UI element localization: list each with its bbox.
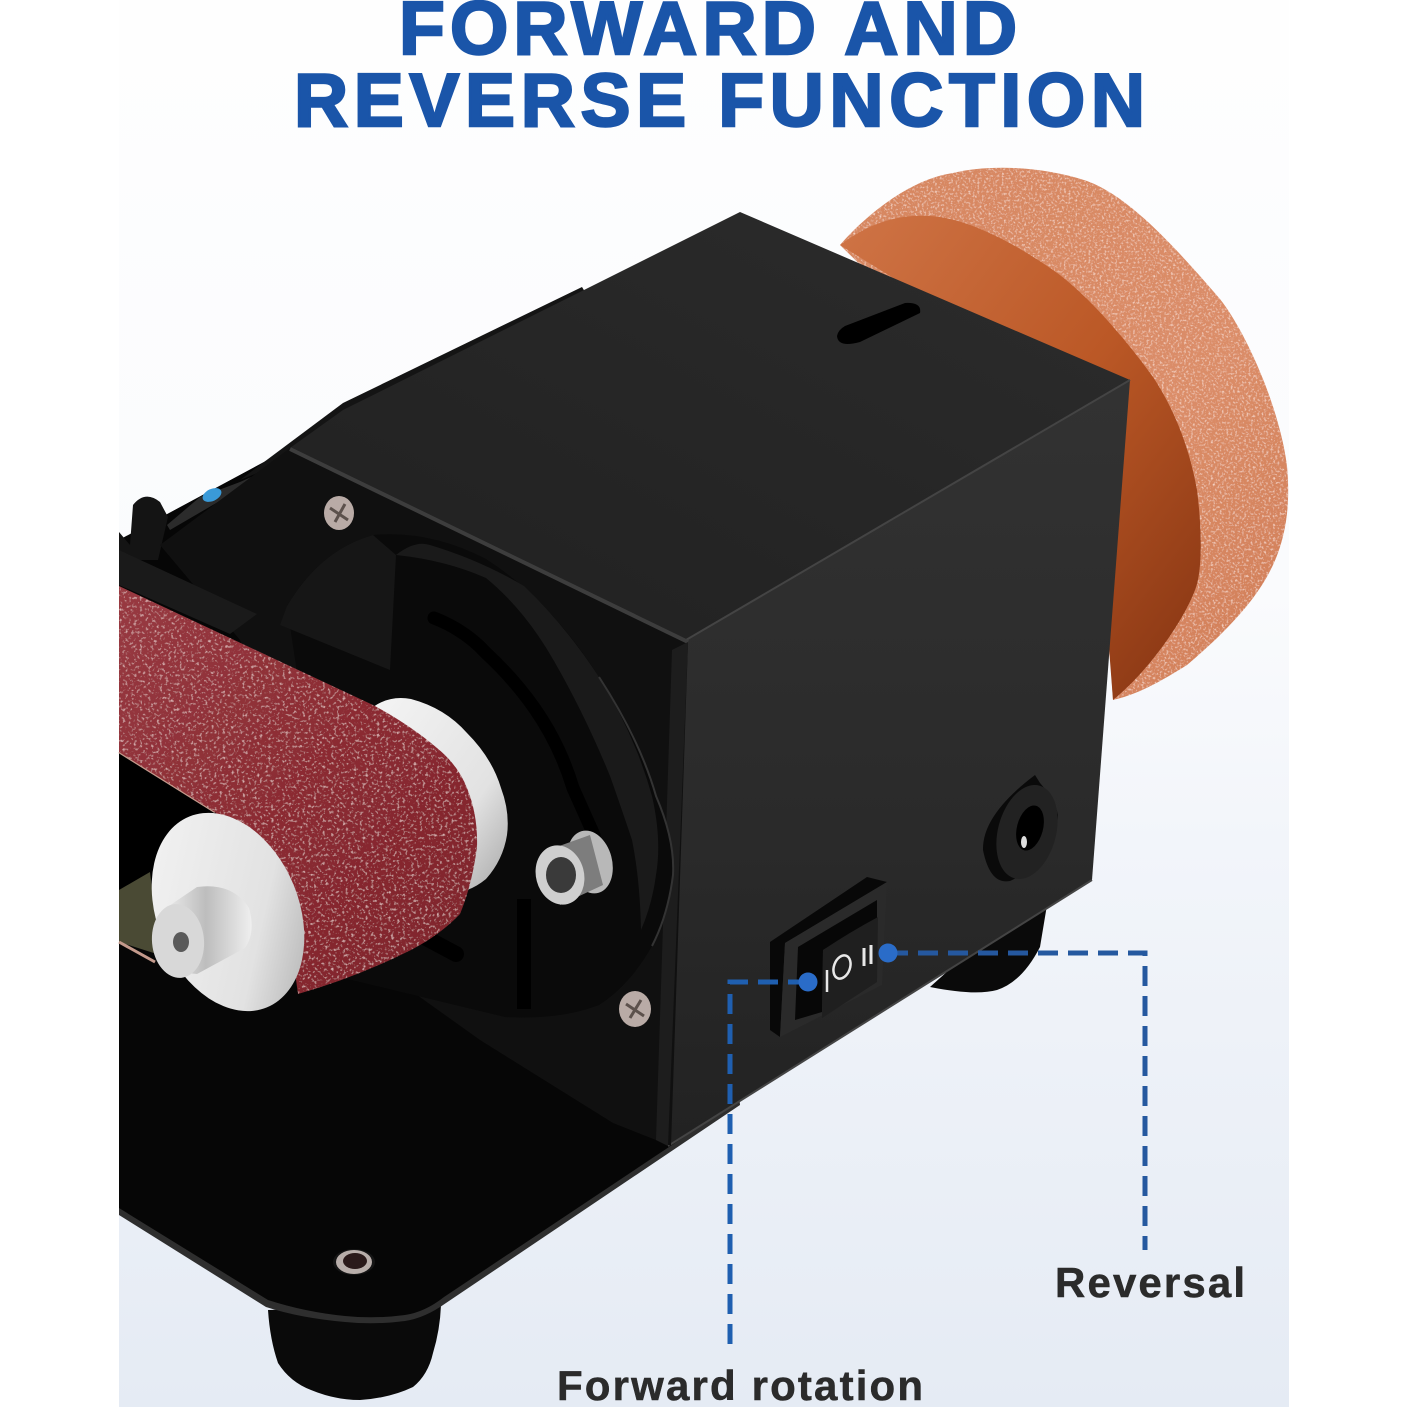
label: reversal: Reversal <box>1055 1259 1245 1306</box>
housing right face <box>668 380 1130 1146</box>
aluminium roller end <box>124 790 332 1034</box>
shaft <box>160 886 252 974</box>
front rubber foot <box>268 1305 441 1400</box>
screw: top <box>324 496 354 530</box>
callout line: forward rotation <box>730 972 818 1349</box>
title <box>294 0 1145 142</box>
olive belt backing <box>119 872 160 955</box>
title: REVERSE FUNCTION <box>294 58 1145 142</box>
plate top ridge <box>290 449 688 642</box>
belt edge <box>119 752 215 812</box>
lower notch <box>517 899 531 1009</box>
power socket <box>983 775 1067 886</box>
sanding belt roller <box>119 586 477 994</box>
wheel rim <box>840 168 1288 700</box>
rocker switch <box>770 877 887 1037</box>
knob <box>119 497 168 560</box>
side strip <box>656 642 688 1146</box>
shaft tip <box>149 902 207 980</box>
raised quadrant <box>280 535 396 670</box>
slot on top <box>837 303 920 344</box>
blue nub <box>200 485 224 505</box>
roller back collar <box>373 698 508 891</box>
callout line: reversal <box>878 944 1145 1250</box>
arc slot <box>434 618 594 835</box>
grinding wheel <box>840 168 1288 700</box>
base plate <box>119 448 740 1323</box>
housing front plate <box>160 448 688 1146</box>
rear rubber foot <box>930 905 1047 992</box>
back bar behind belt <box>119 550 257 634</box>
hex bolt <box>529 825 620 910</box>
shaft hole <box>173 932 189 952</box>
small top surface <box>167 460 290 530</box>
lower belt run <box>119 752 215 962</box>
lower slot <box>411 930 456 954</box>
raised ring <box>396 544 658 930</box>
plate lip <box>668 880 1092 1146</box>
wheel inner face <box>840 216 1201 700</box>
rim highlight <box>599 677 673 946</box>
screw: bottom <box>619 991 651 1027</box>
housing top face <box>290 212 1130 640</box>
edge highlight <box>686 380 1130 640</box>
rear rail and left silhouette <box>119 287 590 560</box>
motor housing <box>160 212 1130 1146</box>
round plate <box>280 534 673 1018</box>
screw: base plate <box>333 1249 375 1275</box>
